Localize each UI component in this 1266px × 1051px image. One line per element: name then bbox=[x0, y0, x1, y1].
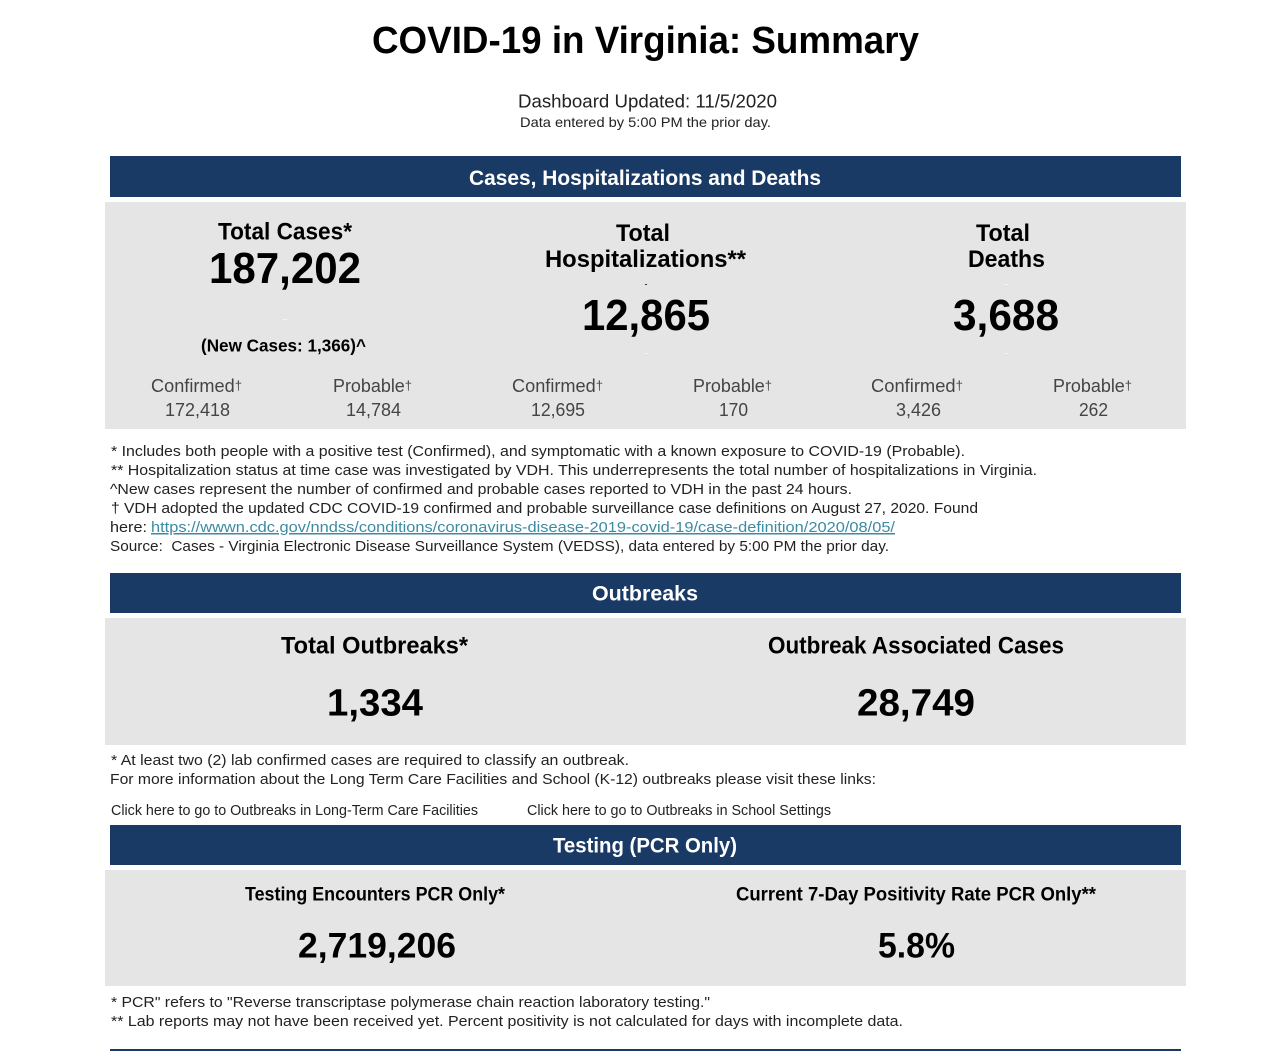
outbreak associated cases metric bbox=[768, 632, 1064, 724]
testing encounters metric bbox=[245, 884, 505, 966]
cases confirmed breakdown: Confirmed bbox=[151, 376, 234, 396]
outbreak links bbox=[111, 803, 831, 819]
cases probable breakdown: 14,784 bbox=[346, 400, 401, 420]
hospitalizations probable breakdown bbox=[693, 376, 772, 420]
deaths probable breakdown bbox=[1053, 376, 1132, 420]
outbreak links: Click here to go to Outbreaks in Long-Term Care Facilities bbox=[111, 803, 478, 819]
footnotes: cases section: ^New cases represent the number of confirmed and probable cases reported to VDH in the past 24 hours. bbox=[110, 481, 852, 498]
cases probable breakdown: † bbox=[405, 378, 412, 393]
total outbreaks metric: Total Outbreaks* bbox=[281, 632, 469, 660]
footnotes: cases section: ** Hospitalization status at time case was investigated by VDH. This underrepresents the total number of hospitalizations in Virginia. bbox=[111, 462, 1037, 479]
total deaths metric bbox=[953, 220, 1059, 354]
positivity rate metric: Current 7-Day Positivity Rate PCR Only** bbox=[736, 884, 1096, 906]
cases confirmed breakdown bbox=[151, 376, 242, 420]
cases probable breakdown bbox=[333, 376, 412, 420]
outbreak associated cases metric: Outbreak Associated Cases bbox=[768, 632, 1064, 660]
footnotes: cases section: † VDH adopted the updated CDC COVID-19 confirmed and probable surveillance case definitions on August 27, 2020. Found bbox=[111, 500, 978, 517]
total deaths metric: 3,688 bbox=[953, 291, 1059, 340]
footnotes: cases section: here: bbox=[110, 519, 147, 536]
panel: testing bbox=[105, 870, 1186, 986]
deaths probable breakdown: Probable bbox=[1053, 376, 1125, 396]
total deaths metric: Deaths bbox=[968, 246, 1045, 273]
deaths probable breakdown: 262 bbox=[1079, 400, 1108, 420]
footnotes: cases section: Source: Cases - Virginia Electronic Disease Surveillance System (VEDSS), data entered by 5:00 PM the prior day. bbox=[110, 538, 889, 555]
hospitalizations confirmed breakdown: Confirmed bbox=[512, 376, 595, 396]
total outbreaks metric bbox=[281, 632, 469, 724]
testing encounters metric: Testing Encounters PCR Only* bbox=[245, 884, 505, 906]
section banner: testing: Testing (PCR Only) bbox=[553, 834, 737, 858]
section banner: cases, hospitalizations and deaths bbox=[110, 156, 1181, 197]
cases confirmed breakdown: † bbox=[235, 378, 242, 393]
section banner: cases, hospitalizations and deaths: Cases, Hospitalizations and Deaths bbox=[469, 167, 821, 190]
total outbreaks metric: 1,334 bbox=[327, 682, 423, 724]
deaths confirmed breakdown: Confirmed bbox=[871, 376, 954, 396]
deaths confirmed breakdown: † bbox=[956, 378, 963, 393]
testing encounters metric: 2,719,206 bbox=[298, 926, 456, 966]
deaths confirmed breakdown: 3,426 bbox=[896, 400, 941, 420]
total cases metric: 187,202 bbox=[209, 244, 361, 293]
cases probable breakdown: Probable bbox=[333, 376, 405, 396]
deaths probable breakdown: † bbox=[1125, 378, 1132, 393]
total hospitalizations metric: 12,865 bbox=[582, 291, 710, 340]
outbreak associated cases metric: 28,749 bbox=[857, 682, 975, 724]
section banner: testing bbox=[110, 825, 1181, 865]
total cases metric: (New Cases: 1,366)^ bbox=[201, 336, 366, 356]
footnotes: testing section bbox=[111, 994, 903, 1030]
footnotes: testing section: * PCR" refers to "Reverse transcriptase polymerase chain reaction laboratory testing." bbox=[111, 994, 710, 1011]
panel: outbreaks bbox=[105, 618, 1186, 745]
hospitalizations confirmed breakdown bbox=[512, 376, 603, 420]
section banner: outbreaks: Outbreaks bbox=[592, 582, 698, 606]
panel: cases, hospitalizations and deaths bbox=[105, 202, 1186, 429]
dashboard updated date: Data entered by 5:00 PM the prior day. bbox=[520, 114, 771, 130]
footnotes: testing section: ** Lab reports may not have been received yet. Percent positivity is not calculated for days with incomplete data. bbox=[111, 1013, 903, 1030]
total hospitalizations metric: Hospitalizations** bbox=[545, 246, 747, 273]
hospitalizations probable breakdown: Probable bbox=[693, 376, 765, 396]
total hospitalizations metric: Total bbox=[616, 220, 670, 247]
total deaths metric: Total bbox=[976, 220, 1030, 247]
hospitalizations confirmed breakdown: † bbox=[596, 378, 603, 393]
positivity rate metric bbox=[736, 884, 1096, 966]
positivity rate metric: 5.8% bbox=[878, 926, 955, 966]
dashboard updated date bbox=[518, 92, 777, 130]
footnotes: outbreaks section: For more information about the Long Term Care Facilities and School (K-12) outbreaks please visit these links: bbox=[110, 771, 876, 788]
dashboard updated date: Dashboard Updated: 11/5/2020 bbox=[518, 92, 777, 112]
footnotes: cases section bbox=[110, 443, 1037, 555]
footnotes: cases section: https://wwwn.cdc.gov/nndss/conditions/coronavirus-disease-2019-covid-19/case-definition/2020/08/05/ bbox=[151, 519, 896, 536]
outbreak links: Click here to go to Outbreaks in School Settings bbox=[527, 803, 831, 819]
deaths confirmed breakdown bbox=[871, 376, 963, 420]
title: COVID-19 in Virginia: Summary bbox=[372, 20, 919, 62]
hospitalizations probable breakdown: † bbox=[765, 378, 772, 393]
cases confirmed breakdown: 172,418 bbox=[165, 400, 230, 420]
hospitalizations probable breakdown: 170 bbox=[719, 400, 748, 420]
hospitalizations confirmed breakdown: 12,695 bbox=[531, 400, 585, 420]
total cases metric bbox=[201, 218, 366, 356]
total cases metric: Total Cases* bbox=[218, 218, 353, 246]
footnotes: cases section: * Includes both people with a positive test (Confirmed), and symptomatic with a known exposure to COVID-19 (Probable). bbox=[111, 443, 965, 460]
footnotes: outbreaks section bbox=[110, 752, 876, 788]
footnotes: outbreaks section: * At least two (2) lab confirmed cases are required to classify an outbreak. bbox=[111, 752, 629, 769]
total hospitalizations metric bbox=[545, 220, 747, 354]
section banner: outbreaks bbox=[110, 573, 1181, 613]
